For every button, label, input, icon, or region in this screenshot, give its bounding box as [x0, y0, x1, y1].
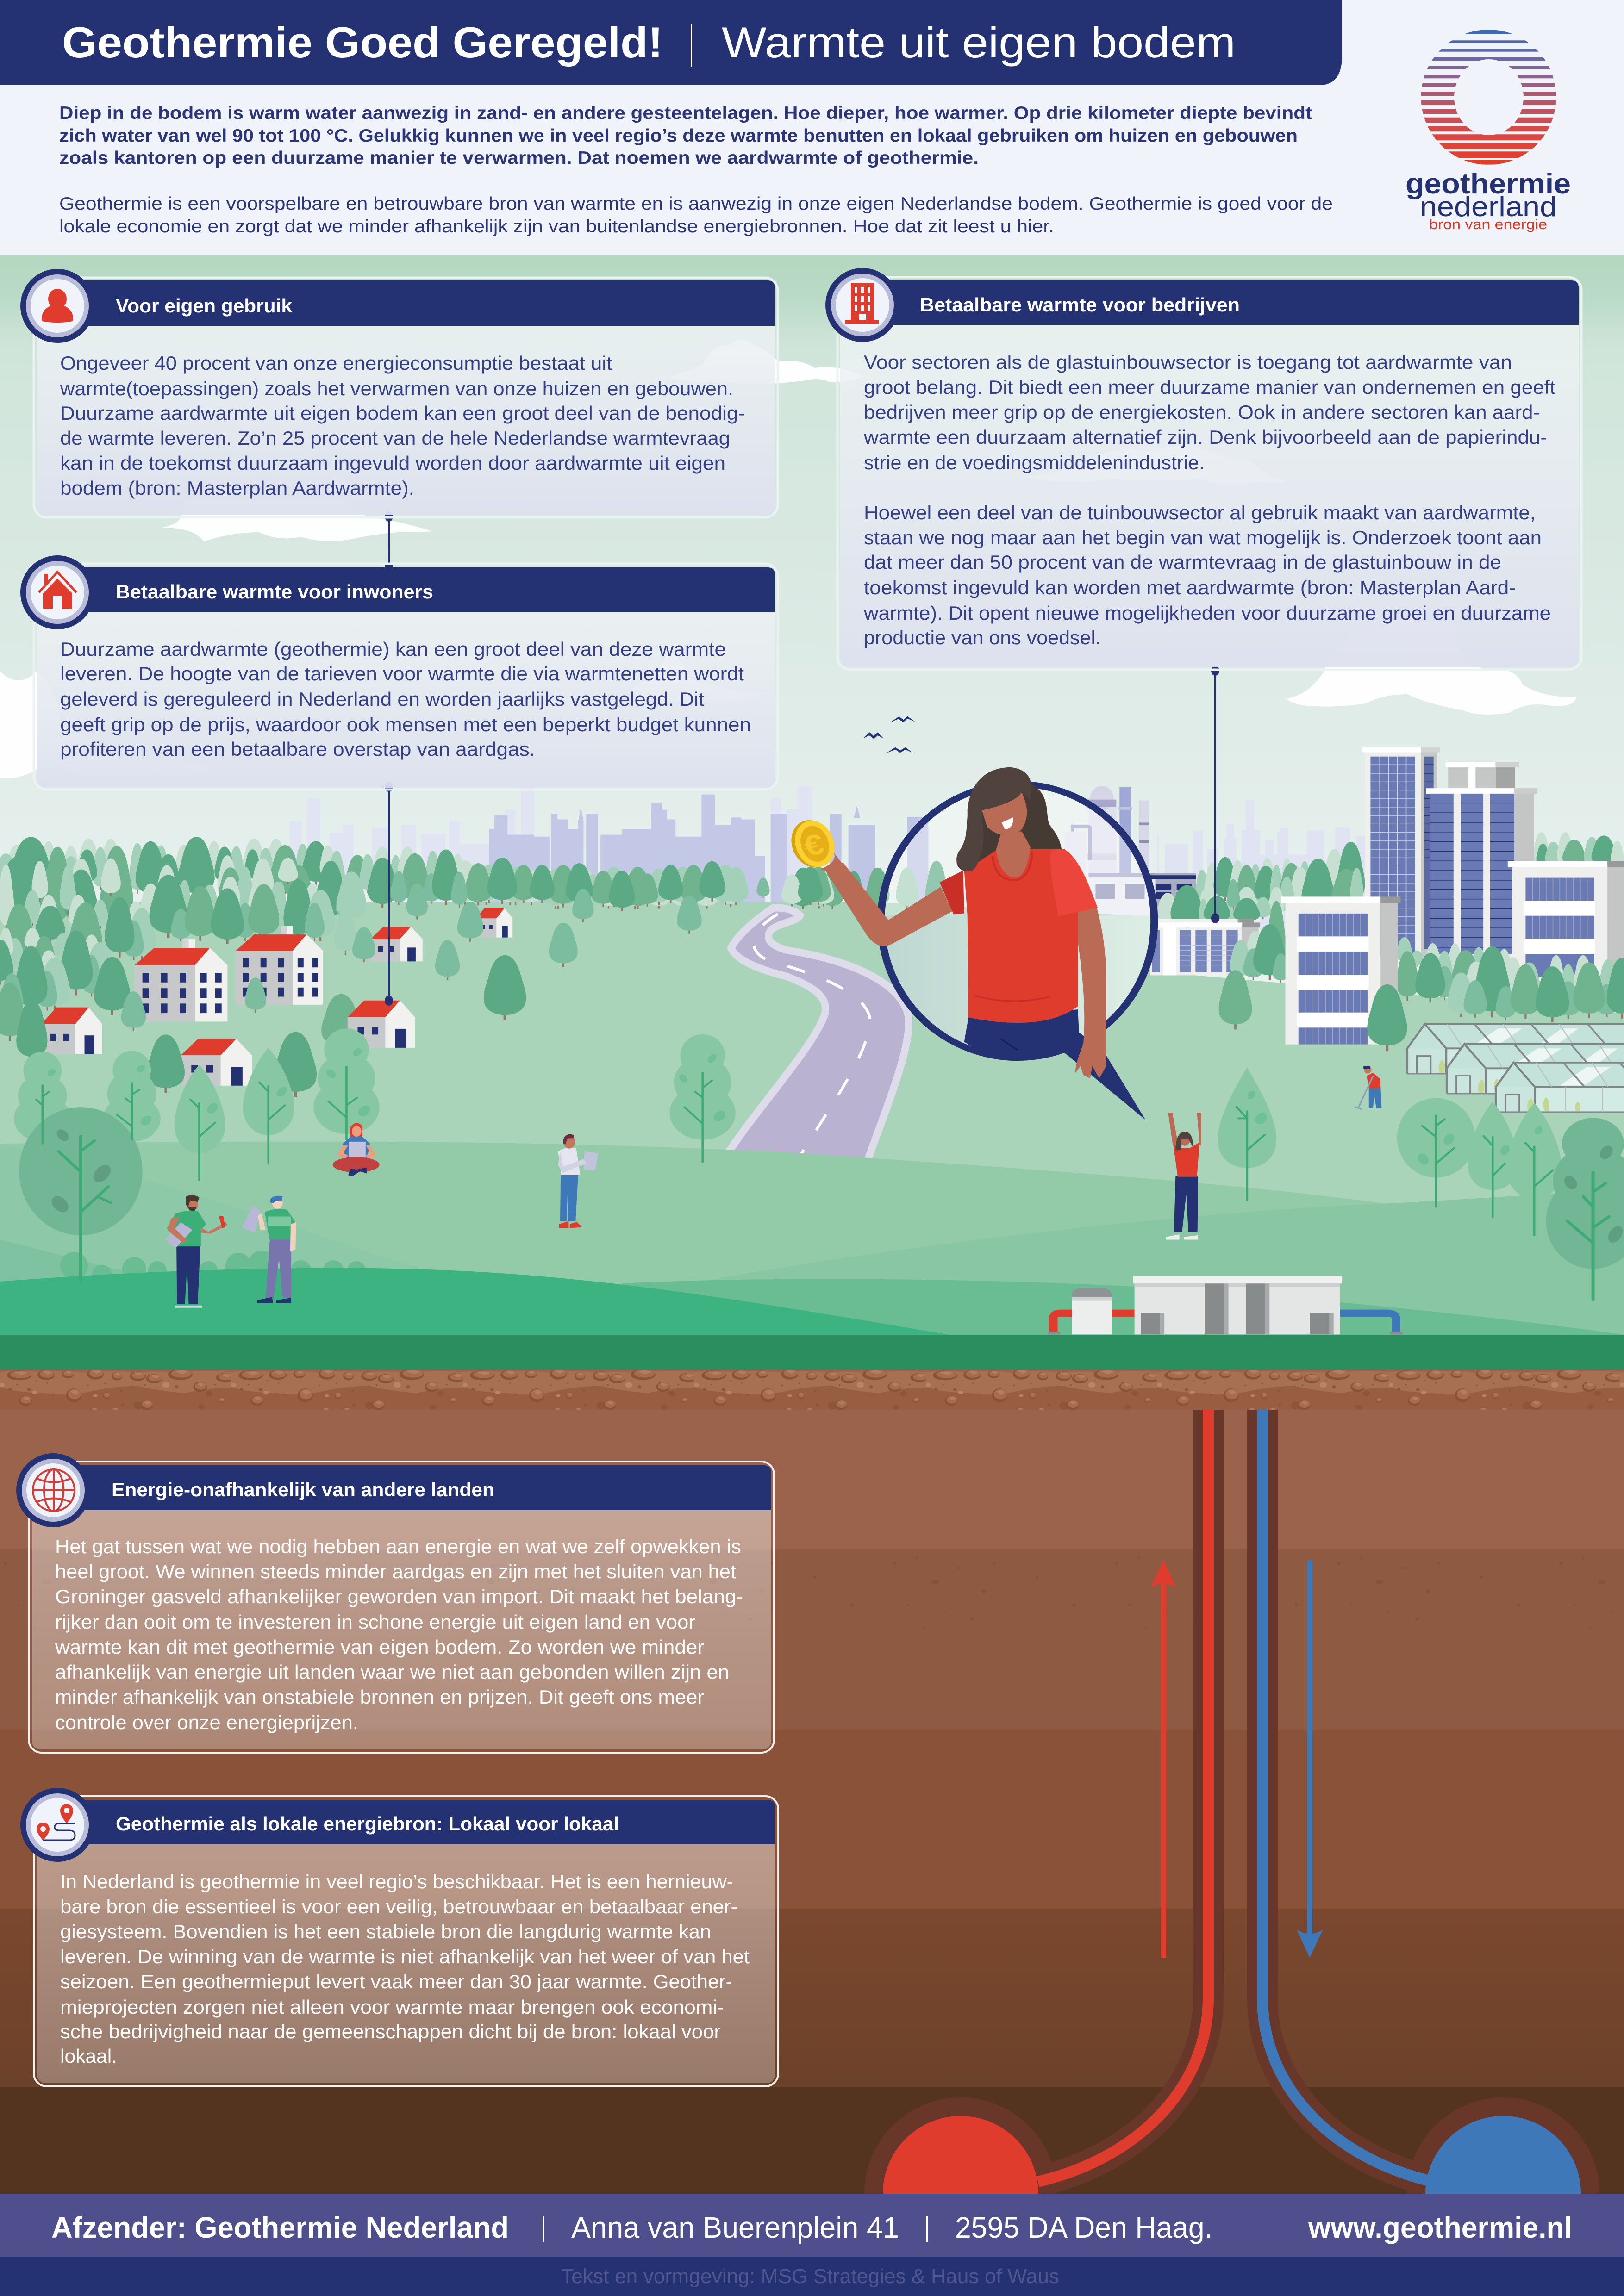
blue haired person with paper	[242, 1196, 296, 1303]
body text: warmte). Dit opent nieuwe mogelijkheden voor duurzame groei en duurzame	[863, 602, 1551, 624]
geothermal plant	[1048, 1276, 1403, 1334]
panel: Energie-onafhankelijk van andere landen	[16, 1453, 774, 1753]
title banner	[0, 0, 1342, 85]
seated woman with tablet	[333, 1123, 380, 1176]
winding road	[725, 908, 909, 1162]
intro regular text: Geothermie is een voorspelbare en betrouwbare bron van warmte en is aanwezig in onze eigen Nederlandse bodem. Geothermie is goed voor de	[59, 194, 1333, 214]
body text	[55, 1536, 743, 1733]
body text: rijker dan ooit om te investeren in schone energie uit eigen land en voor	[55, 1611, 695, 1633]
body text: giesysteem. Bovendien is het een stabiele bron die langdurig warmte kan	[60, 1921, 711, 1942]
forest on the left far side	[450, 858, 834, 911]
panel: Betaalbare warmte voor bedrijven	[825, 268, 1581, 670]
body text: geeft grip op de prijs, waardoor ook mensen met een beperkt budget kunnen	[60, 714, 751, 735]
panel: Geothermie als lokale energiebron	[20, 1788, 778, 2086]
body text: heel groot. We winnen steeds minder aardgas en zijn met het sluiten van het	[55, 1561, 736, 1582]
body text: Voor sectoren als de glastuinbouwsector is toegang tot aardwarmte van	[864, 351, 1512, 373]
meadow	[0, 902, 1624, 1338]
round trees left	[14, 1028, 736, 1281]
logo Geothermie Nederland	[1405, 30, 1571, 232]
body text: Hoewel een deel van de tuinbouwsector al gebruik maakt van aardwarmte,	[864, 502, 1536, 523]
industrial plant behind the circle	[1065, 786, 1196, 915]
sender: Afzender: Geothermie Nederland	[51, 2211, 509, 2244]
icon: office building	[825, 268, 899, 342]
trees in front of houses	[0, 877, 770, 1097]
body text: leveren. De winning van de warmte is niet afhankelijk van het weer of van het	[60, 1946, 750, 1967]
body text	[863, 351, 1555, 648]
well casings	[1038, 1410, 1433, 2182]
icon: person	[20, 269, 94, 343]
city skyline	[290, 787, 812, 910]
body text: Duurzame aardwarmte uit eigen bodem kan een groot deel van de benodig-	[60, 402, 745, 424]
trees beside small office	[1219, 901, 1289, 1029]
body text: seizoen. Een geothermieput levert vaak meer dan 30 jaar warmte. Geother-	[60, 1971, 732, 1992]
heading: Betaalbare warmte voor bedrijven	[920, 294, 1240, 316]
intro regular text	[59, 194, 1333, 236]
body text: kan in de toekomst duurzaam ingevuld worden door aardwarmte uit eigen	[60, 452, 725, 474]
body text: productie van ons voedsel.	[864, 627, 1101, 648]
body text: warmte een duurzaam alternatief zijn. Denk bijvoorbeeld aan de papierindu-	[863, 426, 1547, 448]
subtitle: Warmte uit eigen bodem	[722, 18, 1236, 67]
body text: strie en de voedingsmiddelenindustrie.	[864, 452, 1205, 473]
heading: Voor eigen gebruik	[116, 295, 293, 317]
body text: bodem (bron: Masterplan Aardwarmte).	[60, 477, 414, 499]
footer address bar	[0, 2194, 1624, 2257]
distant skyline right	[787, 786, 1365, 935]
body text: Ongeveer 40 procent van onze energieconsumptie bestaat uit	[60, 352, 612, 374]
body text: Groninger gasveld afhankelijker geworden van import. Dit maakt het belang-	[55, 1586, 743, 1607]
mid block	[1281, 896, 1400, 1045]
body text: groot belang. Dit biedt een meer duurzame manier van ondernemen en geeft	[864, 376, 1555, 398]
body text: de warmte leveren. Zo’n 25 procent van de hele Nederlandse warmtevraag	[60, 427, 730, 449]
connector lines	[385, 511, 1219, 1006]
credit bar: Tekst en vormgeving: MSG Strategies & Haus of Waus	[561, 2265, 1059, 2288]
right block	[1508, 861, 1624, 977]
cold reservoir	[1407, 2097, 1599, 2290]
arrow up red	[1150, 1560, 1176, 1958]
heading: Energie-onafhankelijk van andere landen	[112, 1479, 494, 1500]
body text: minder afhankelijk van onstabiele bronnen en prijzen. Dit geeft ons meer	[55, 1686, 704, 1708]
body text	[60, 1871, 750, 2067]
intro regular text: lokale economie en zorgt dat we minder afhankelijk zijn van buitenlandse energiebronnen. Hoe dat zit leest u hier.	[59, 217, 1054, 236]
people on the meadow left	[166, 1123, 599, 1308]
body text: leveren. De hoogte van de tarieven voor warmte die via warmtenetten wordt	[60, 663, 744, 684]
cold water pipe	[1262, 1410, 1433, 2182]
panel: Betaalbare warmte voor inwoners	[20, 555, 778, 790]
body text: mieprojecten zorgen niet alleen voor warmte maar brengen ook economi-	[60, 1996, 724, 2018]
hot pipe red	[1053, 1313, 1135, 1332]
body text: dat meer dan 50 procent van de warmtevraag in de glastuinbouw in de	[864, 551, 1501, 573]
arrow down blue	[1297, 1560, 1323, 1958]
postcode: 2595 DA Den Haag.	[955, 2211, 1212, 2244]
gold euro coin: €	[801, 828, 827, 862]
credit bar	[0, 2257, 1624, 2296]
page header background	[0, 0, 1624, 259]
small office	[1150, 919, 1260, 975]
body text: toekomst ingevuld kan worden met aardwarmte (bron: Masterplan Aard-	[864, 577, 1516, 598]
trees in front of the towers	[1396, 937, 1624, 1022]
body text: geleverd is gereguleerd in Nederland en worden jaarlijks vastgelegd. Dit	[60, 688, 704, 710]
large woman in circle holding a coin	[786, 767, 1156, 1120]
tall tower	[1362, 747, 1440, 957]
logo Geothermie Nederland: bron van energie	[1429, 216, 1547, 232]
sky background	[0, 255, 1624, 1042]
blue tower	[1426, 762, 1537, 954]
panel: Voor eigen gebruik	[20, 269, 778, 517]
logo Geothermie Nederland: geothermie	[1405, 168, 1571, 200]
website: www.geothermie.nl	[1308, 2211, 1572, 2244]
title: Geothermie Goed Geregeld!	[62, 18, 663, 67]
body text: lokaal.	[60, 2045, 117, 2067]
birds	[863, 716, 916, 753]
greenhouses	[1407, 1024, 1624, 1112]
icon: globe	[16, 1453, 90, 1527]
logo Geothermie Nederland: nederland	[1420, 191, 1557, 222]
body text: controle over onze energieprijzen.	[55, 1711, 358, 1733]
body text: afhankelijk van energie uit landen waar we niet aan gebonden willen zijn en	[55, 1661, 729, 1683]
office buildings	[1150, 747, 1624, 1051]
body text: Het gat tussen wat we nodig hebben aan energie en wat we zelf opwekken is	[55, 1536, 741, 1557]
forest behind the business district	[1156, 832, 1624, 929]
topsoil with rocks	[0, 1370, 1624, 1410]
body text: bedrijven meer grip op de energiekosten. Ook in andere sectoren kan aard-	[864, 401, 1540, 423]
cold pipe blue	[1340, 1313, 1396, 1332]
rolling hills	[0, 1141, 1624, 1338]
forest on the left	[0, 837, 468, 1050]
body text: warmte(toepassingen) zoals het verwarmen van onze huizen en gebouwen.	[60, 378, 733, 399]
icon: route pins	[20, 1788, 94, 1862]
hot water pipe	[1038, 1410, 1208, 2182]
address: Anna van Buerenplein 41	[571, 2211, 899, 2244]
body text: In Nederland is geothermie in veel regio’s beschikbaar. Het is een hernieuw-	[60, 1871, 733, 1892]
woman cheering	[1166, 1113, 1201, 1240]
earth layers	[0, 1410, 1624, 2198]
gardener	[1355, 1066, 1381, 1109]
heading: Betaalbare warmte voor inwoners	[116, 581, 433, 603]
houses	[42, 908, 512, 1086]
intro bold text: zich water van wel 90 tot 100 °C. Gelukkig kunnen we in veel regio’s deze warmte benutten en lokaal gebruiken om huizen en gebouwen	[59, 126, 1298, 146]
body text: sche bedrijvigheid naar de gemeenschappen dicht bij de bron: lokaal voor	[60, 2021, 721, 2042]
intro bold text: Diep in de bodem is warm water aanwezig in zand- en andere gesteentelagen. Hoe dieper, hoe warmer. Op drie kilometer diepte bevindt	[59, 103, 1312, 123]
hot reservoir	[864, 2097, 1057, 2290]
body text: warmte kan dit met geothermie van eigen bodem. Zo worden we minder	[55, 1636, 704, 1658]
green ground band	[0, 1335, 1624, 1370]
body text: staan we nog maar aan het begin van wat mogelijk is. Onderzoek toont aan	[864, 527, 1542, 548]
gold euro coin	[786, 817, 839, 871]
man reading paper	[558, 1134, 599, 1228]
body text: profiteren van een betaalbare overstap van aardgas.	[60, 738, 535, 760]
small people right	[1166, 1066, 1381, 1240]
body text: bare bron die essentieel is voor een veilig, betrouwbaar en betaalbaar ener-	[60, 1896, 737, 1917]
body text: Duurzame aardwarmte (geothermie) kan een groot deel van deze warmte	[60, 638, 726, 660]
heading: Geothermie als lokale energiebron: Lokaal voor lokaal	[116, 1813, 619, 1835]
round trees right	[1218, 1067, 1624, 1300]
intro bold text: zoals kantoren op een duurzame manier te verwarmen. Dat noemen we aardwarmte of geothermie.	[59, 148, 979, 168]
intro bold text	[59, 103, 1312, 168]
icon: house	[20, 555, 94, 629]
forest behind the circle	[791, 861, 948, 912]
body text	[60, 352, 745, 499]
bearded man with clipboard	[166, 1195, 227, 1308]
body text	[60, 638, 751, 760]
clouds	[0, 340, 1577, 778]
